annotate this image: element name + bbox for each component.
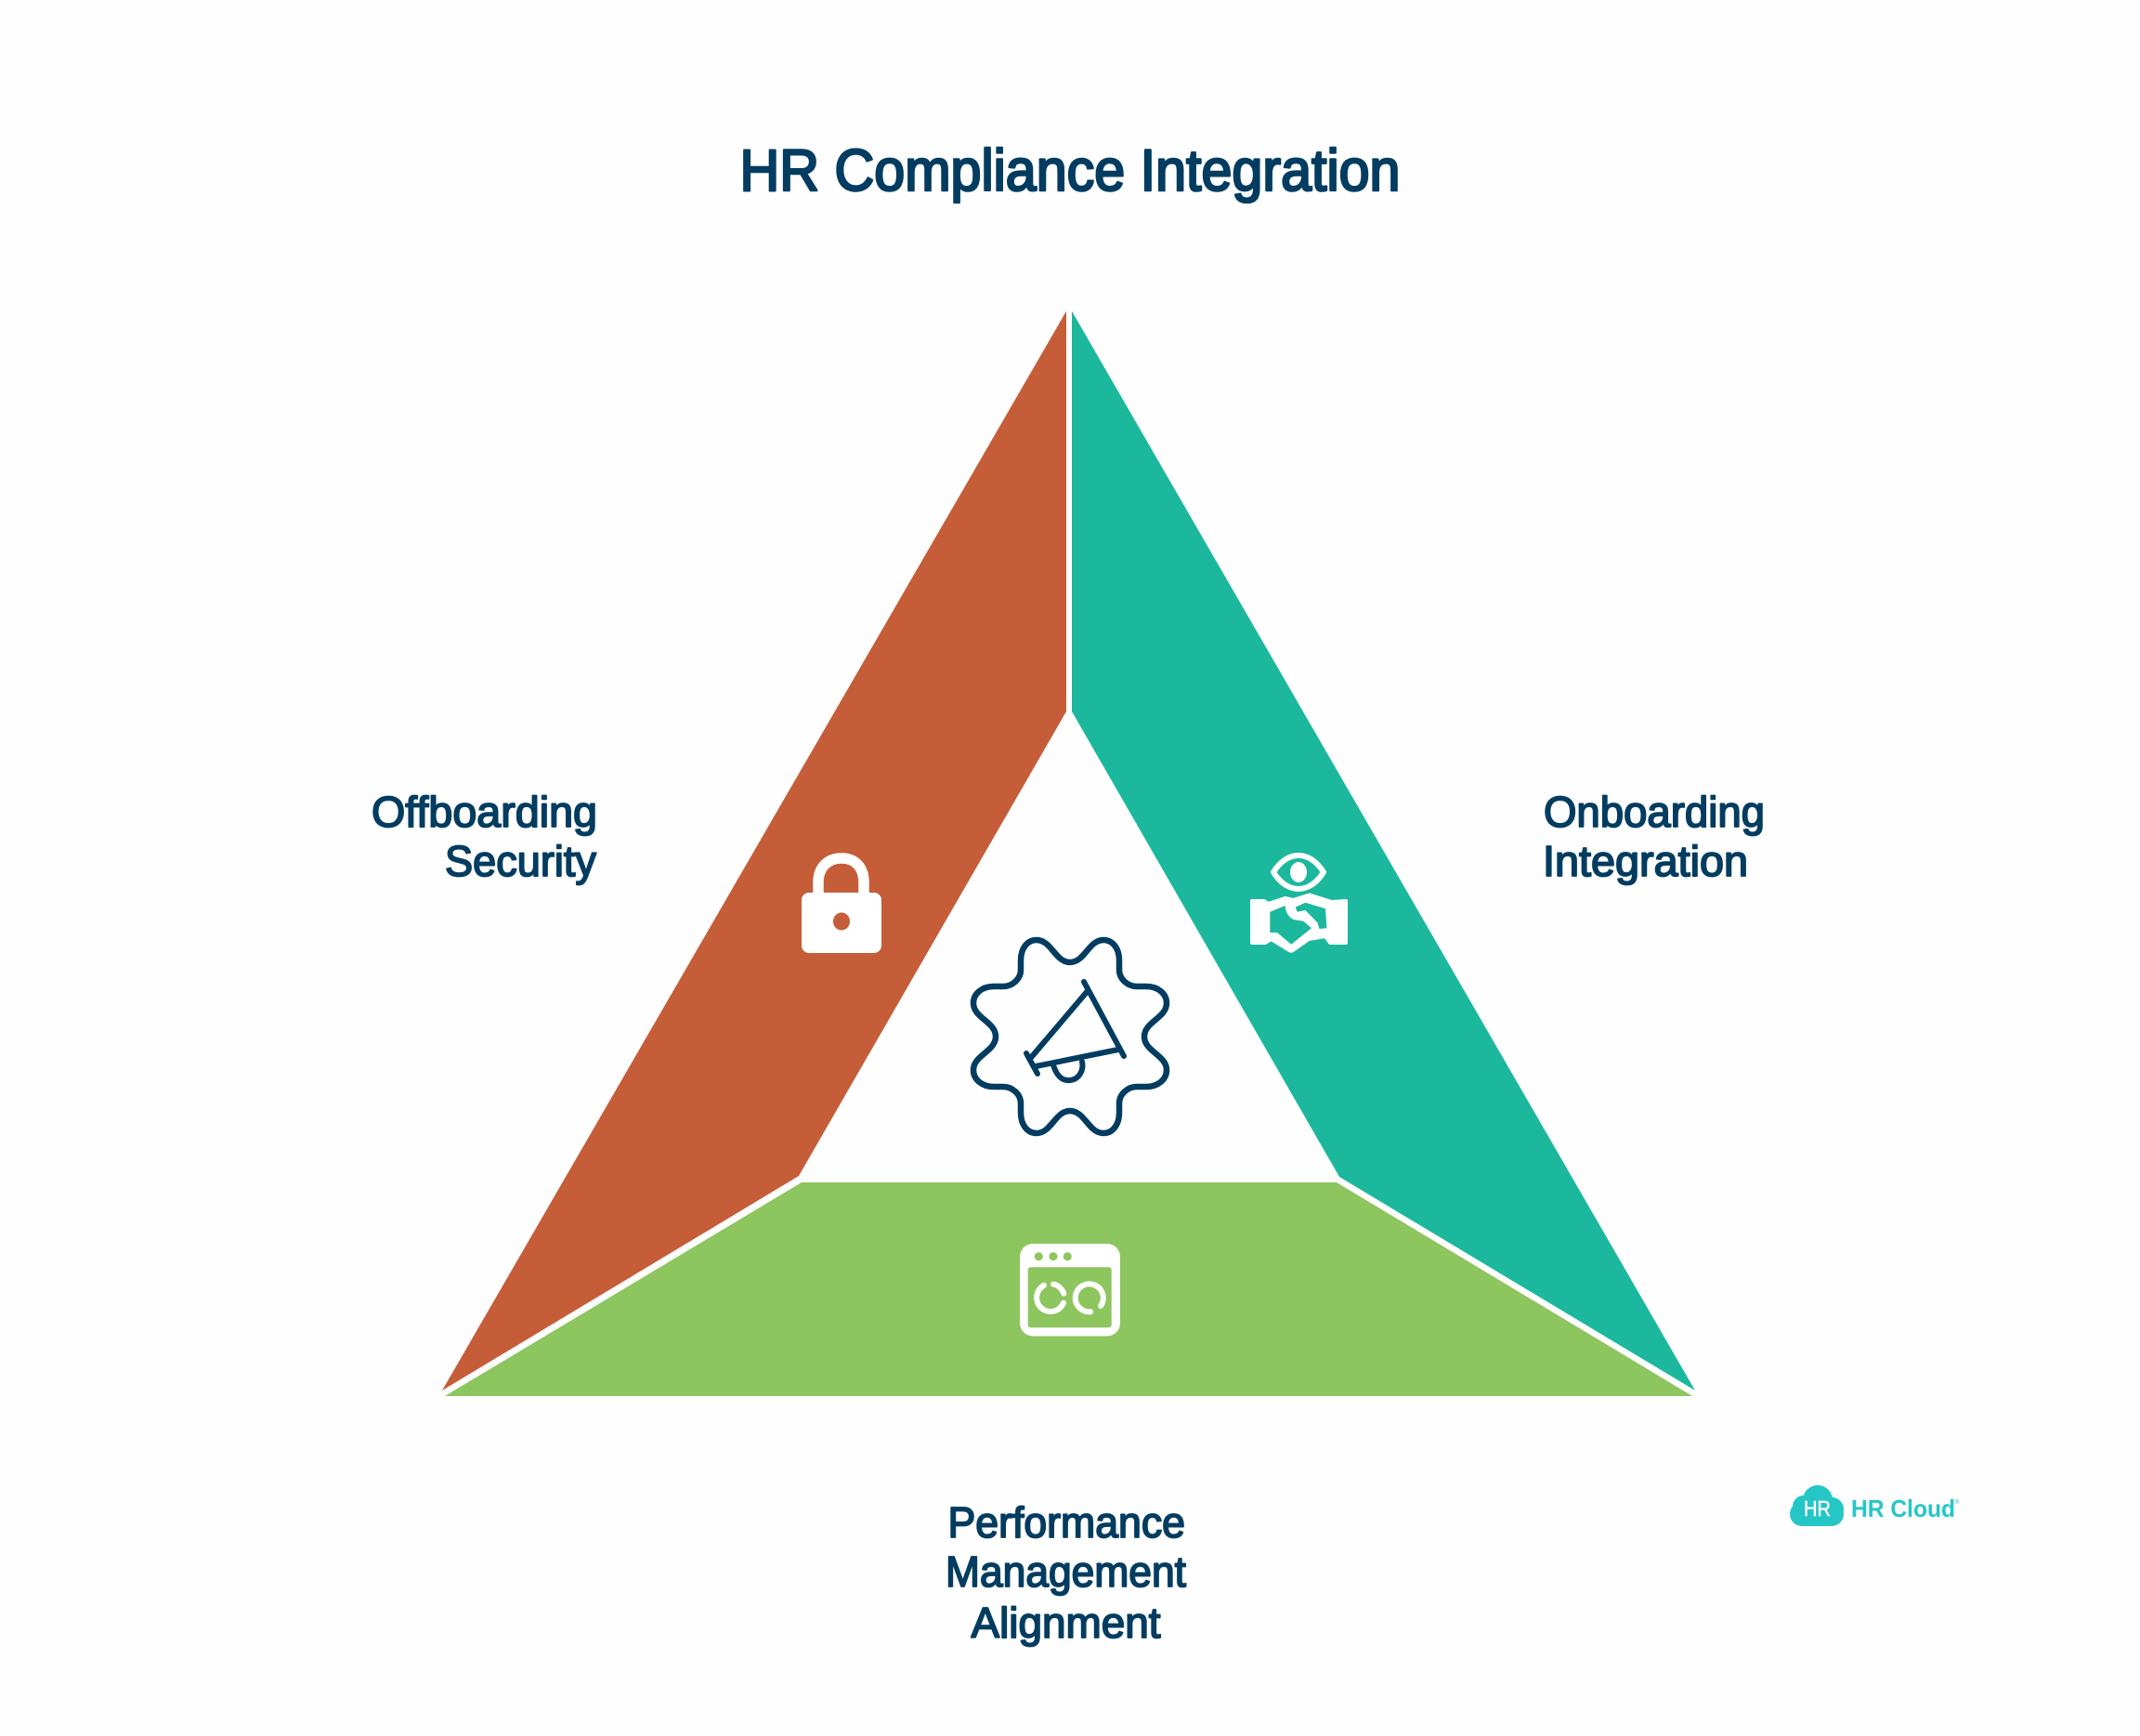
icon: gear with megaphone bbox=[973, 940, 1167, 1133]
icon: padlock bbox=[802, 858, 881, 953]
logo: HR Cloud bbox=[1790, 1485, 1960, 1526]
label: performance management alignment: Alignment bbox=[972, 1599, 1161, 1647]
icon: eye and handshake bbox=[1252, 855, 1346, 951]
title: HR Compliance Integration bbox=[739, 138, 1401, 203]
label: offboarding security: Offboarding bbox=[372, 788, 597, 836]
label: performance management alignment: Performance bbox=[947, 1498, 1185, 1547]
panel: onboarding integration segment bbox=[1072, 311, 1695, 1390]
panel: offboarding security segment bbox=[442, 311, 1066, 1390]
logo: HR Cloud: HR Cloud bbox=[1851, 1495, 1955, 1522]
logo: HR Cloud: HR bbox=[1804, 1496, 1831, 1521]
label: onboarding integration: Integration bbox=[1543, 837, 1748, 885]
label: onboarding integration: Onboarding bbox=[1544, 788, 1765, 836]
label: offboarding security: Security bbox=[445, 837, 597, 885]
label: performance management alignment bbox=[946, 1498, 1186, 1647]
label: performance management alignment: Management bbox=[946, 1547, 1186, 1596]
panel: performance management segment bbox=[445, 1182, 1692, 1396]
icon: browser window with loops bbox=[1020, 1244, 1120, 1336]
label: onboarding integration bbox=[1543, 788, 1765, 885]
label: offboarding security bbox=[372, 788, 597, 885]
logo: HR Cloud: ® bbox=[1955, 1499, 1960, 1506]
